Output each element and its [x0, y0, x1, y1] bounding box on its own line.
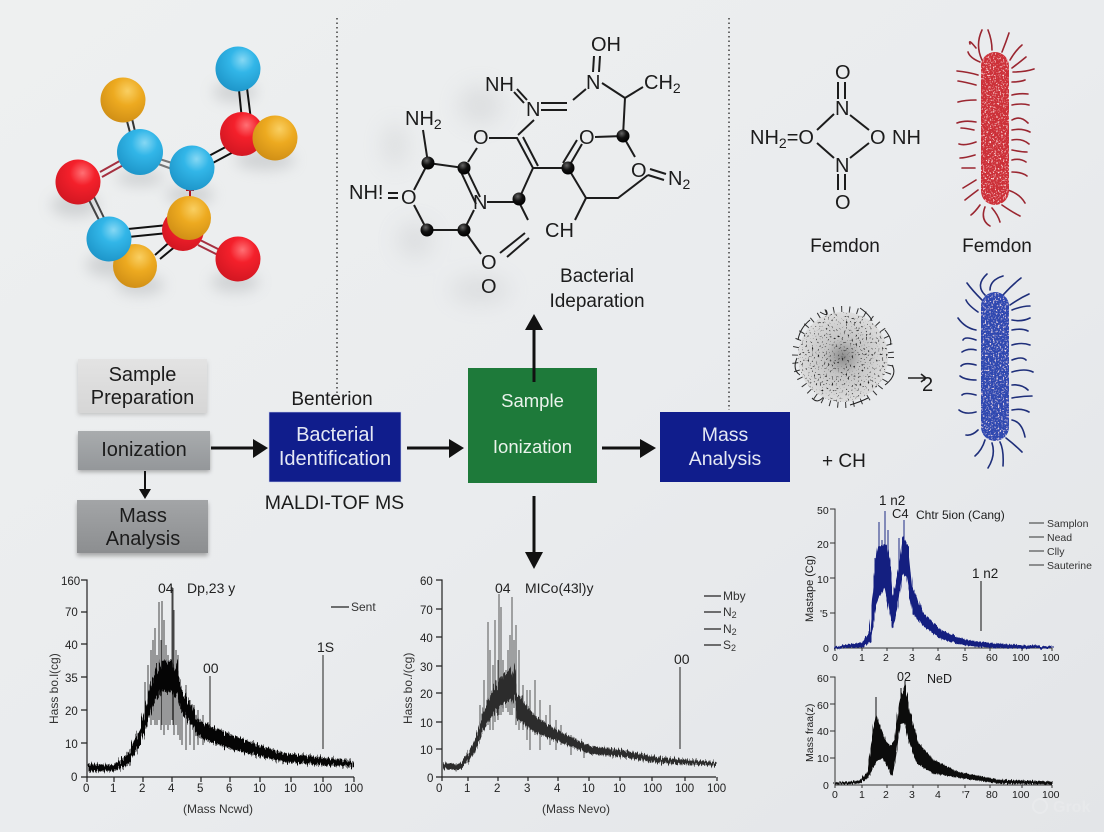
chart middle labels: Hass bo./(cg) [401, 653, 415, 724]
atom nodes [420, 130, 630, 236]
structural formula: centre: NH! [349, 182, 383, 204]
chart blue labels: 60 [986, 652, 998, 664]
chart middle labels: 30 [420, 662, 433, 674]
box: Mass Analysis left [77, 500, 208, 556]
structural formula: centre: OH [591, 34, 621, 56]
watermark [1033, 799, 1090, 816]
structural formula: right: O [835, 62, 851, 84]
structural formula: centre: O [579, 127, 595, 149]
box: Bacterial Identification: Bacterial [296, 424, 374, 446]
spectrum trace [835, 537, 1052, 648]
chart blue labels: Chtr 5ion (Cang) [916, 508, 1005, 522]
chart middle labels: MICo(43l)y [525, 580, 593, 596]
structural formula: centre: 2 [682, 176, 690, 192]
chart left labels: 5 [197, 783, 203, 795]
chart: black spectrum [830, 677, 1052, 788]
chart middle labels: 3 [524, 783, 530, 795]
chart black labels: 60 [817, 673, 829, 685]
arrow: ionization to mass analysis [139, 471, 151, 499]
chart middle labels: 10 [420, 745, 433, 757]
chart black labels: Mass fraa(z) [804, 704, 816, 762]
chart: spectrum middle [436, 580, 717, 781]
structural formula: centre: N [526, 99, 540, 121]
box: Mass Analysis right: Mass [702, 424, 749, 446]
label: Bacterial Ideparation: Ideparation [549, 291, 645, 312]
chart left labels: 1 [110, 783, 116, 795]
box: Mass Analysis left: Mass [119, 505, 167, 527]
chart left labels: 10 [284, 783, 297, 795]
chart middle labels: 1 [464, 783, 470, 795]
icon: round bacterium [795, 308, 894, 405]
chart black labels: 2 [883, 789, 889, 801]
chart left labels: 70 [65, 607, 78, 619]
chart middle labels: 40 [420, 633, 433, 645]
structural formula: right: 2 [779, 135, 787, 151]
chart black labels: 100 [1012, 789, 1030, 801]
box: Ionization: Ionization [101, 439, 187, 461]
chart middle labels: 2 [732, 610, 737, 620]
box: Sample Ionization: Sample [501, 390, 564, 411]
chart blue labels: 20 [817, 539, 829, 551]
chart left labels: 20 [65, 706, 78, 718]
chart black labels: 100 [1042, 789, 1060, 801]
structural formula: centre: N [586, 72, 600, 94]
chart left labels: 100 [313, 783, 332, 795]
chart black labels: 10 [817, 753, 829, 765]
chart black labels: 4 [935, 789, 941, 801]
structural formula: right: N [835, 155, 849, 177]
chart middle labels: 2 [732, 627, 737, 637]
chart blue labels: 5 [962, 652, 968, 664]
structural formula: right: N [835, 98, 849, 120]
chart blue labels: Clly [1047, 546, 1065, 558]
chart black labels [804, 670, 1060, 801]
chart blue labels [804, 493, 1092, 664]
chart middle labels: 0 [436, 783, 442, 795]
structural formula: right: NH [892, 127, 921, 149]
chart left labels: 160 [61, 576, 80, 588]
label: Benterion: Benterion [291, 389, 373, 410]
chart blue labels: 1 n2 [972, 566, 998, 581]
chart left labels: 04 [158, 580, 174, 596]
chart middle labels: 100 [675, 783, 694, 795]
chart left labels: 0 [83, 783, 89, 795]
label: Bacterial Ideparation [549, 266, 645, 312]
chart black labels: 80 [986, 789, 998, 801]
arrow: up [525, 314, 543, 382]
chart middle labels: 0 [427, 773, 433, 785]
structural formula: centre: CH [545, 220, 574, 242]
chart blue labels: C4 [892, 506, 909, 521]
ball-and-stick molecule [51, 46, 298, 295]
chart middle labels: 70 [420, 605, 433, 617]
chart black labels: 0 [823, 780, 829, 792]
box: Sample Preparation: Preparation [91, 387, 194, 409]
chart left labels [47, 576, 376, 816]
chart black labels: 3 [909, 789, 915, 801]
box: Sample Preparation: Sample [109, 364, 176, 386]
chart middle labels [401, 576, 746, 816]
icon: red rod bacterium [957, 30, 1034, 226]
chart middle labels: 2 [494, 783, 500, 795]
chart middle labels: 20 [420, 689, 433, 701]
chart blue labels: 1 [859, 652, 865, 664]
label: Femdon left: Femdon [810, 236, 880, 257]
chart black labels: 1 [859, 789, 865, 801]
chart blue labels: 50 [817, 505, 829, 517]
structural formula: centre: CH [644, 72, 673, 94]
chart black labels: '7 [962, 789, 970, 801]
structural formula: centre: O [481, 252, 497, 274]
chart blue labels: 2 [883, 652, 889, 664]
chart blue labels: 0 [823, 643, 829, 655]
structural formula: centre: NH [405, 108, 434, 130]
arrow: to bacterial identification [211, 439, 268, 458]
chart left labels: 40 [65, 640, 78, 652]
arrow: to sample ionization [407, 439, 464, 458]
chart middle labels: 2 [731, 643, 736, 653]
chart black labels: 40 [817, 726, 829, 738]
chart middle labels: 10 [420, 718, 433, 730]
chart blue labels: 4 [935, 652, 941, 664]
chart middle labels: 00 [674, 651, 690, 667]
chart blue labels: Sauterine [1047, 560, 1092, 572]
chart middle labels: (Mass Nevo) [542, 802, 610, 816]
structural formula: right: O [870, 127, 886, 149]
structural formula: centre: 2 [434, 116, 442, 132]
chart left labels: 0 [71, 772, 77, 784]
chart middle labels: N [723, 622, 732, 636]
chart middle labels: 100 [643, 783, 662, 795]
label: Femdon right: Femdon [962, 236, 1032, 257]
structural formula: right: =O [787, 127, 814, 149]
arrow with 2: 2 [922, 374, 933, 396]
spectrum trace [88, 660, 353, 772]
chart blue labels: 100 [1042, 652, 1060, 664]
chart left labels: 100 [344, 783, 363, 795]
chart black labels: 0 [832, 789, 838, 801]
structural formula: centre: O [401, 187, 417, 209]
icon: blue rod bacterium [958, 274, 1033, 468]
box: Bacterial Identification [269, 412, 401, 482]
box: Sample Ionization [468, 368, 597, 483]
chart blue labels: '5 [820, 608, 828, 620]
chart black labels: 60 [817, 700, 829, 712]
chart middle labels: 10 [613, 783, 626, 795]
chart blue labels: Nead [1047, 532, 1072, 544]
arrow: to mass analysis [602, 439, 656, 458]
chart middle labels: 60 [420, 576, 433, 588]
chart blue labels: 0 [832, 652, 838, 664]
label: MALDI-TOF MS: MALDI-TOF MS [265, 492, 404, 514]
box: Sample Ionization: Ionization [493, 436, 572, 457]
chart left labels: 10 [253, 783, 266, 795]
chart left labels: 35 [65, 673, 78, 685]
spectrum trace [443, 665, 717, 770]
chart left labels: 2 [139, 783, 145, 795]
arrow with 2 [908, 374, 933, 396]
chart left labels: 4 [168, 783, 175, 795]
chart black labels: 02 [897, 670, 911, 684]
structural formula: right: NH [750, 127, 779, 149]
box: Mass Analysis left: Analysis [106, 528, 180, 550]
chart middle labels: 10 [582, 783, 595, 795]
structural formula: centre: O [481, 276, 497, 298]
box: Mass Analysis right: Analysis [689, 448, 762, 470]
box: Sample Preparation [78, 359, 207, 415]
chart blue labels: 1 n2 [879, 493, 905, 508]
structural formula: centre: 2 [673, 80, 681, 96]
structural formula: right: O [835, 192, 851, 214]
box: Bacterial Identification: Identification [279, 448, 391, 470]
structural formula: centre: N [473, 192, 487, 214]
chart left labels: 6 [226, 783, 232, 795]
chart left labels: 10 [65, 739, 78, 751]
chart black labels: NeD [927, 672, 952, 686]
chart left labels: (Mass Ncwd) [183, 802, 253, 816]
chart blue labels: Mastape (Cg) [804, 555, 816, 622]
chart: spectrum left [81, 580, 354, 782]
arrow: down [525, 496, 543, 569]
structural formula: centre: O [631, 160, 647, 182]
box: Ionization [78, 431, 210, 472]
chart blue labels: 10 [817, 574, 829, 586]
chart middle labels: 04 [495, 580, 511, 596]
chart middle labels: S [723, 638, 731, 652]
chart blue labels: Samplon [1047, 518, 1089, 530]
chart blue labels: 100 [1012, 652, 1030, 664]
structural formula: centre: N [668, 168, 682, 190]
chart: blue spectrum [830, 509, 1052, 651]
chart left labels: Dp,23 y [187, 580, 235, 596]
chart left labels: 1S [317, 639, 334, 655]
chart blue labels: 3 [909, 652, 915, 664]
structural formula: right [750, 62, 921, 214]
chart middle labels: Mby [723, 589, 746, 603]
structural formula: centre: O [473, 127, 489, 149]
structural formula: centre: NH [485, 74, 514, 96]
chart left labels: Hass bo.l(cg) [47, 653, 61, 724]
watermark: Grok [1053, 799, 1090, 816]
chart middle labels: 4 [554, 783, 561, 795]
chart left labels: Sent [351, 600, 376, 614]
spectrum trace [835, 687, 1052, 784]
chart middle labels: N [723, 605, 732, 619]
chart left labels: 00 [203, 660, 219, 676]
structural formula: centre [349, 34, 690, 304]
label: + CH: + CH [822, 451, 866, 472]
box: Mass Analysis right [660, 412, 790, 482]
chart middle labels: 100 [707, 783, 726, 795]
label: Bacterial Ideparation: Bacterial [560, 266, 634, 287]
